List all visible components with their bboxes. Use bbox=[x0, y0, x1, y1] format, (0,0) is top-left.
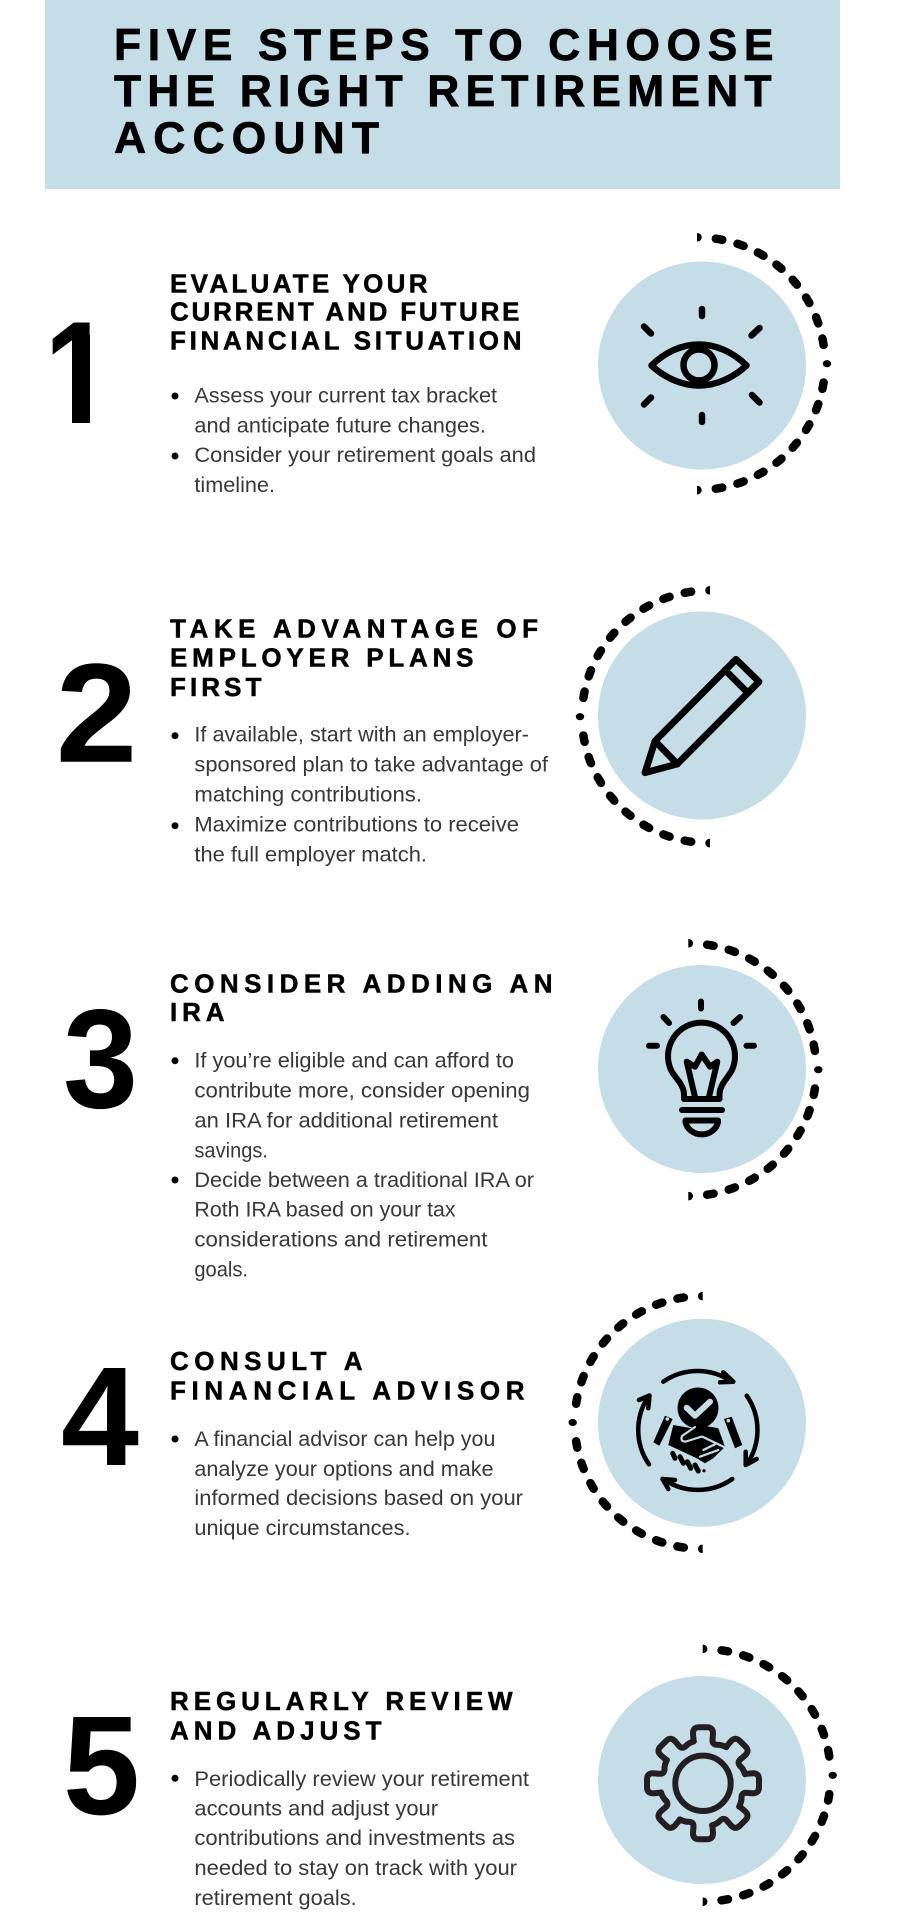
step 5 dashed arc bbox=[703, 1649, 837, 1902]
step 2 heading: FIRST bbox=[170, 672, 262, 702]
step 2 heading: TAKE ADVANTAGE OF bbox=[170, 613, 538, 643]
step 5 bullets: accounts and adjust your bbox=[194, 1798, 438, 1821]
step 3 dashed arc bbox=[688, 943, 822, 1196]
step 3 bullets: savings. bbox=[194, 1140, 268, 1163]
step 3 bullets: considerations and retirement bbox=[194, 1229, 488, 1252]
step 1 bullets bbox=[172, 384, 536, 497]
icon: gear bbox=[647, 1727, 759, 1839]
step 1 heading: EVALUATE YOUR bbox=[170, 269, 428, 299]
step 4 number: 4 bbox=[61, 1337, 139, 1495]
step 1 bullets: Assess your current tax bracket bbox=[194, 384, 497, 407]
step 4 bullets: unique circumstances. bbox=[194, 1517, 410, 1540]
step 3 bullets: goals. bbox=[194, 1259, 248, 1282]
step 3 circle bbox=[598, 965, 806, 1173]
step 4 bullets: informed decisions based on your bbox=[194, 1487, 523, 1510]
step 3 bullets bbox=[172, 1050, 534, 1282]
step 1 heading bbox=[170, 269, 522, 355]
step 3 bullets: an IRA for additional retirement bbox=[194, 1110, 498, 1133]
step 5 bullets: contributions and investments as bbox=[194, 1827, 515, 1850]
step 2 heading: EMPLOYER PLANS bbox=[170, 643, 474, 673]
step 3 heading: IRA bbox=[170, 997, 225, 1027]
step 3 number: 3 bbox=[63, 980, 138, 1138]
step 3 bullets: Decide between a traditional IRA or bbox=[194, 1169, 534, 1192]
title: ACCOUNT bbox=[114, 114, 379, 163]
step 5 heading: REGULARLY REVIEW bbox=[170, 1686, 513, 1716]
step 2 bullets: If available, start with an employer- bbox=[194, 724, 529, 747]
step 5 heading bbox=[170, 1686, 513, 1745]
icon: eye bbox=[644, 309, 760, 422]
step 2 heading bbox=[170, 613, 538, 702]
step 1 heading: CURRENT AND FUTURE bbox=[170, 297, 520, 327]
step 1 circle bbox=[598, 262, 806, 470]
step 2 bullets bbox=[172, 724, 548, 867]
step 3 bullets: contribute more, consider opening bbox=[194, 1080, 530, 1103]
step 5 bullets: retirement goals. bbox=[194, 1887, 357, 1910]
title bbox=[114, 21, 774, 163]
step 2 bullets: Maximize contributions to receive bbox=[194, 814, 519, 837]
title: FIVE STEPS TO CHOOSE bbox=[114, 21, 774, 70]
icon: handshake with arrows bbox=[638, 1371, 757, 1490]
step 4 bullets: A financial advisor can help you bbox=[194, 1428, 495, 1451]
step 1 bullets: timeline. bbox=[194, 474, 275, 497]
step 1 dashed arc bbox=[697, 237, 831, 490]
title: THE RIGHT RETIREMENT bbox=[114, 67, 772, 116]
step 1 number bbox=[52, 322, 90, 423]
step 4 bullets: analyze your options and make bbox=[194, 1458, 494, 1481]
step 5 bullets: needed to stay on track with your bbox=[194, 1857, 517, 1880]
step 3 heading: CONSIDER ADDING AN bbox=[170, 969, 552, 999]
step 5 number: 5 bbox=[63, 1686, 140, 1844]
step 2 number: 2 bbox=[56, 634, 137, 792]
step 1 number: 1 bbox=[44, 291, 112, 454]
step 4 circle bbox=[598, 1319, 806, 1527]
step 2 bullets: matching contributions. bbox=[194, 784, 422, 807]
step 3 heading bbox=[170, 969, 552, 1027]
step 5 circle bbox=[598, 1676, 806, 1884]
step 2 bullets: the full employer match. bbox=[194, 844, 427, 867]
step 2 circle bbox=[598, 612, 806, 820]
step 3 bullets: If you’re eligible and can afford to bbox=[194, 1050, 514, 1073]
step 4 dashed arc bbox=[568, 1296, 703, 1549]
step 5 heading: AND ADJUST bbox=[170, 1715, 382, 1745]
step 2 dashed arc bbox=[576, 590, 710, 843]
step 5 bullets bbox=[172, 1768, 529, 1910]
step 1 bullets: and anticipate future changes. bbox=[194, 414, 486, 437]
step 4 heading: CONSULT A bbox=[170, 1346, 363, 1376]
step 4 bullets bbox=[172, 1428, 523, 1540]
step 2 bullets: sponsored plan to take advantage of bbox=[194, 754, 548, 777]
step 3 bullets: Roth IRA based on your tax bbox=[194, 1199, 456, 1222]
step 1 bullets: Consider your retirement goals and bbox=[194, 444, 536, 467]
icon: light bulb bbox=[649, 1002, 754, 1134]
header banner bbox=[45, 0, 840, 189]
step 4 heading: FINANCIAL ADVISOR bbox=[170, 1375, 525, 1405]
step 4 heading bbox=[170, 1346, 525, 1405]
icon: pencil bbox=[645, 659, 759, 773]
step 5 bullets: Periodically review your retirement bbox=[194, 1768, 529, 1791]
step 1 heading: FINANCIAL SITUATION bbox=[170, 325, 522, 355]
